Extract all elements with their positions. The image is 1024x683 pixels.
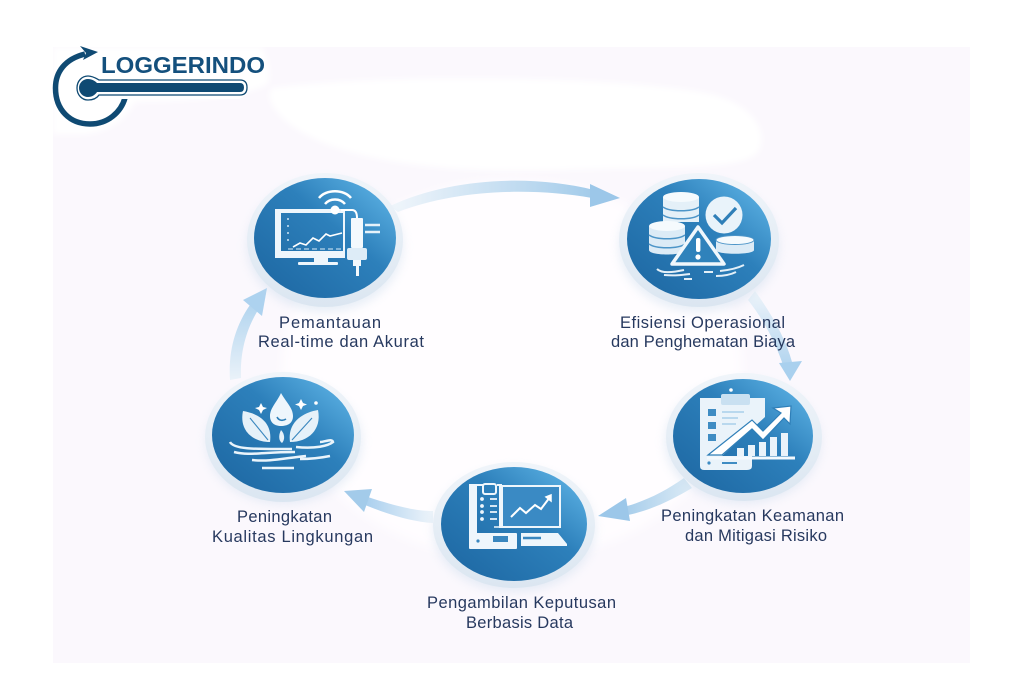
label: environment: Kualitas Lingkungan — [212, 528, 373, 546]
logo wordmark: LOGGERINDO — [101, 52, 265, 78]
icon: monitor and sensor — [275, 191, 380, 276]
arrow: monitoring to efficiency — [390, 181, 620, 212]
logo thermometer — [77, 76, 247, 100]
icon: dashboard and laptop — [469, 484, 567, 549]
label: monitoring: Pemantauan — [279, 314, 381, 332]
arrow: efficiency to security — [748, 291, 802, 381]
label: security: Peningkatan Keamanan — [661, 507, 844, 525]
label: security: dan Mitigasi Risiko — [685, 527, 827, 545]
arrow: environment to monitoring — [230, 288, 267, 380]
white patch top — [270, 78, 761, 171]
arrow: security to decisions — [598, 478, 692, 521]
label: decisions: Berbasis Data — [466, 614, 574, 632]
node: monitoring — [247, 173, 403, 312]
logo swoosh arrow — [56, 46, 125, 124]
logo — [53, 46, 269, 134]
logo backing — [53, 47, 269, 134]
label: decisions: Pengambilan Keputusan — [427, 594, 616, 612]
wifi signal — [330, 206, 340, 214]
node: efficiency — [619, 173, 779, 312]
icon: checklist and growth chart — [700, 388, 795, 470]
arrow: decisions to environment — [344, 489, 433, 523]
white patch center — [282, 180, 742, 560]
node: security — [665, 373, 822, 504]
node: decisions — [433, 462, 595, 592]
node: environment — [205, 372, 362, 504]
label: monitoring: Real-time dan Akurat — [258, 333, 424, 351]
label: efficiency: Efisiensi Operasional — [620, 314, 785, 332]
label: environment: Peningkatan — [237, 508, 332, 526]
label: efficiency: dan Penghematan Biaya — [611, 333, 796, 351]
icon: database stacks with warning — [649, 192, 754, 279]
icon: droplet, leaves and water — [230, 393, 333, 468]
